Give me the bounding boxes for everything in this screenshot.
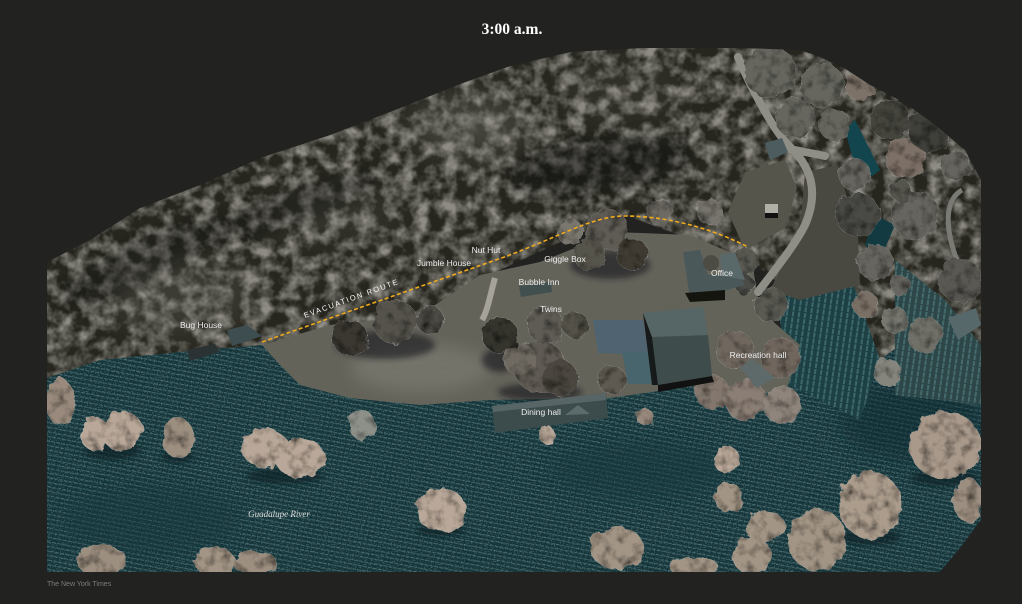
tree shadows on the lawn (335, 251, 650, 401)
place labels: Dining hall (521, 407, 561, 417)
place labels: Bubble Inn (519, 277, 560, 287)
place labels: Office (711, 268, 733, 278)
place labels: Bug House (180, 320, 222, 330)
bubble inn building (519, 282, 552, 297)
evacuation route (262, 216, 748, 342)
place labels: Nut Hut (472, 245, 501, 255)
place labels: Giggle Box (544, 254, 587, 264)
river floodwater (47, 340, 982, 575)
small shed (765, 204, 778, 218)
forest light and shadow (51, 60, 692, 333)
source credit: The New York Times (47, 581, 112, 588)
flooded grid at right (775, 120, 981, 420)
field right of road (770, 165, 860, 300)
grass near office (728, 160, 797, 250)
forest base (47, 340, 981, 378)
path near cabins (482, 278, 495, 320)
place labels: Recreation hall (730, 350, 786, 360)
bug house buildings (187, 325, 262, 361)
east forest (744, 46, 982, 386)
groves on the grounds (332, 199, 801, 424)
camp road (738, 57, 825, 292)
north-east house (765, 138, 788, 160)
east track (946, 188, 964, 259)
building: dining hall (492, 393, 608, 433)
flood tree shadows (84, 440, 979, 545)
place labels (180, 245, 786, 417)
recreation hall building (740, 358, 775, 388)
place labels: Twins (540, 304, 562, 314)
river label: Guadalupe River (248, 509, 310, 519)
place labels: Jumble House (417, 258, 471, 268)
east building (948, 308, 981, 340)
tennis courts (593, 320, 655, 384)
title: 3:00 a.m. (482, 21, 542, 38)
route label: EVACUATION ROUTE (303, 277, 400, 320)
camp grounds (262, 232, 800, 405)
office building (683, 250, 745, 302)
gym building (643, 307, 714, 392)
lit lawn (350, 344, 490, 392)
forest texture (47, 48, 981, 378)
trees in the flood (46, 378, 983, 577)
